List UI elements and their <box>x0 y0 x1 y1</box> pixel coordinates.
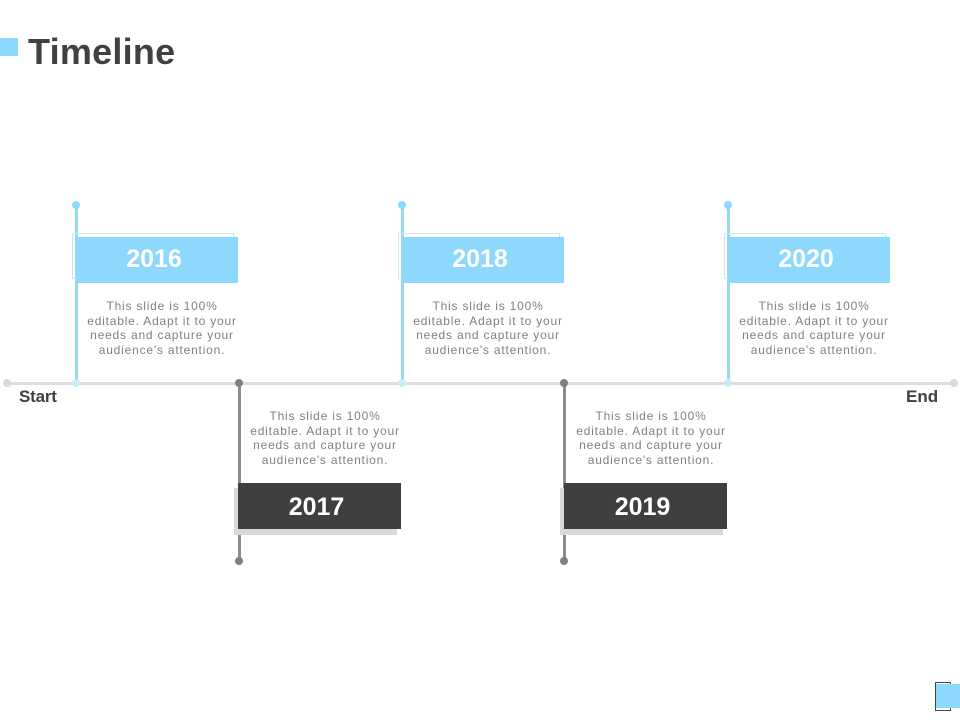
bottom dot 2017 <box>235 557 243 565</box>
icon fill <box>936 684 960 708</box>
text 2019: audience's attention. <box>588 453 714 467</box>
stem 2020 <box>727 205 730 383</box>
text 2017 <box>250 409 400 467</box>
milestone 2017 <box>234 379 401 565</box>
milestone 2018 <box>398 201 564 387</box>
axis dot 2016 <box>72 379 80 387</box>
text 2019: needs and capture your <box>579 438 723 452</box>
axis dot 2019 <box>560 379 568 387</box>
text 2016: needs and capture your <box>90 328 234 342</box>
page number icon <box>935 682 960 711</box>
text 2020: This slide is 100% <box>758 299 870 313</box>
stem 2019 <box>563 383 566 561</box>
text 2016: editable. Adapt it to your <box>87 314 237 328</box>
year 2016 <box>76 237 238 283</box>
bottom dot 2019 <box>560 557 568 565</box>
year 2020 <box>728 237 890 283</box>
text 2019: This slide is 100% <box>595 409 707 423</box>
text 2018: needs and capture your <box>416 328 560 342</box>
title accent square <box>0 38 18 56</box>
text 2017: needs and capture your <box>253 438 397 452</box>
title: Timeline <box>28 31 175 72</box>
card outline 2020 <box>724 233 886 279</box>
stem 2017 <box>238 383 240 561</box>
text 2018: This slide is 100% <box>432 299 544 313</box>
text 2018: audience's attention. <box>425 343 551 357</box>
axis dot 2018 <box>398 379 406 387</box>
axis dot 2017 <box>235 379 243 387</box>
axis dot 2020 <box>724 379 732 387</box>
year 2016: 2016 <box>126 245 182 273</box>
text 2020: audience's attention. <box>751 343 877 357</box>
year 2017 <box>238 483 401 529</box>
year 2018: 2018 <box>452 245 508 273</box>
year 2018 <box>402 237 564 283</box>
card shadow 2017 <box>234 488 397 535</box>
milestone 2016 <box>72 201 238 387</box>
icon outline <box>935 682 951 711</box>
card outline 2016 <box>72 233 234 279</box>
year 2019 <box>564 483 727 529</box>
text 2017: This slide is 100% <box>269 409 381 423</box>
text 2017: audience's attention. <box>262 453 388 467</box>
axis start dot <box>3 379 11 387</box>
year 2020: 2020 <box>778 245 834 273</box>
text 2020: editable. Adapt it to your <box>739 314 889 328</box>
stem 2018 <box>401 205 404 383</box>
text 2019 <box>576 409 726 467</box>
year 2017: 2017 <box>289 493 344 521</box>
text 2018: editable. Adapt it to your <box>413 314 563 328</box>
axis end dot <box>950 379 958 387</box>
text 2016: audience's attention. <box>99 343 225 357</box>
year 2019: 2019 <box>615 493 670 521</box>
text 2020: needs and capture your <box>742 328 886 342</box>
text 2017: editable. Adapt it to your <box>250 424 400 438</box>
top dot 2016 <box>72 201 80 209</box>
text 2016 <box>87 299 237 357</box>
text 2020 <box>739 299 889 357</box>
start label: Start <box>19 387 57 406</box>
main timeline axis <box>7 382 954 385</box>
milestone 2020 <box>724 201 890 387</box>
end label: End <box>906 387 938 406</box>
text 2019: editable. Adapt it to your <box>576 424 726 438</box>
card shadow 2019 <box>560 488 723 535</box>
stem 2016 <box>75 205 78 383</box>
top dot 2020 <box>724 201 732 209</box>
top dot 2018 <box>398 201 406 209</box>
text 2016: This slide is 100% <box>106 299 218 313</box>
text 2018 <box>413 299 563 357</box>
card outline 2018 <box>398 233 560 279</box>
milestone 2019 <box>560 379 727 565</box>
